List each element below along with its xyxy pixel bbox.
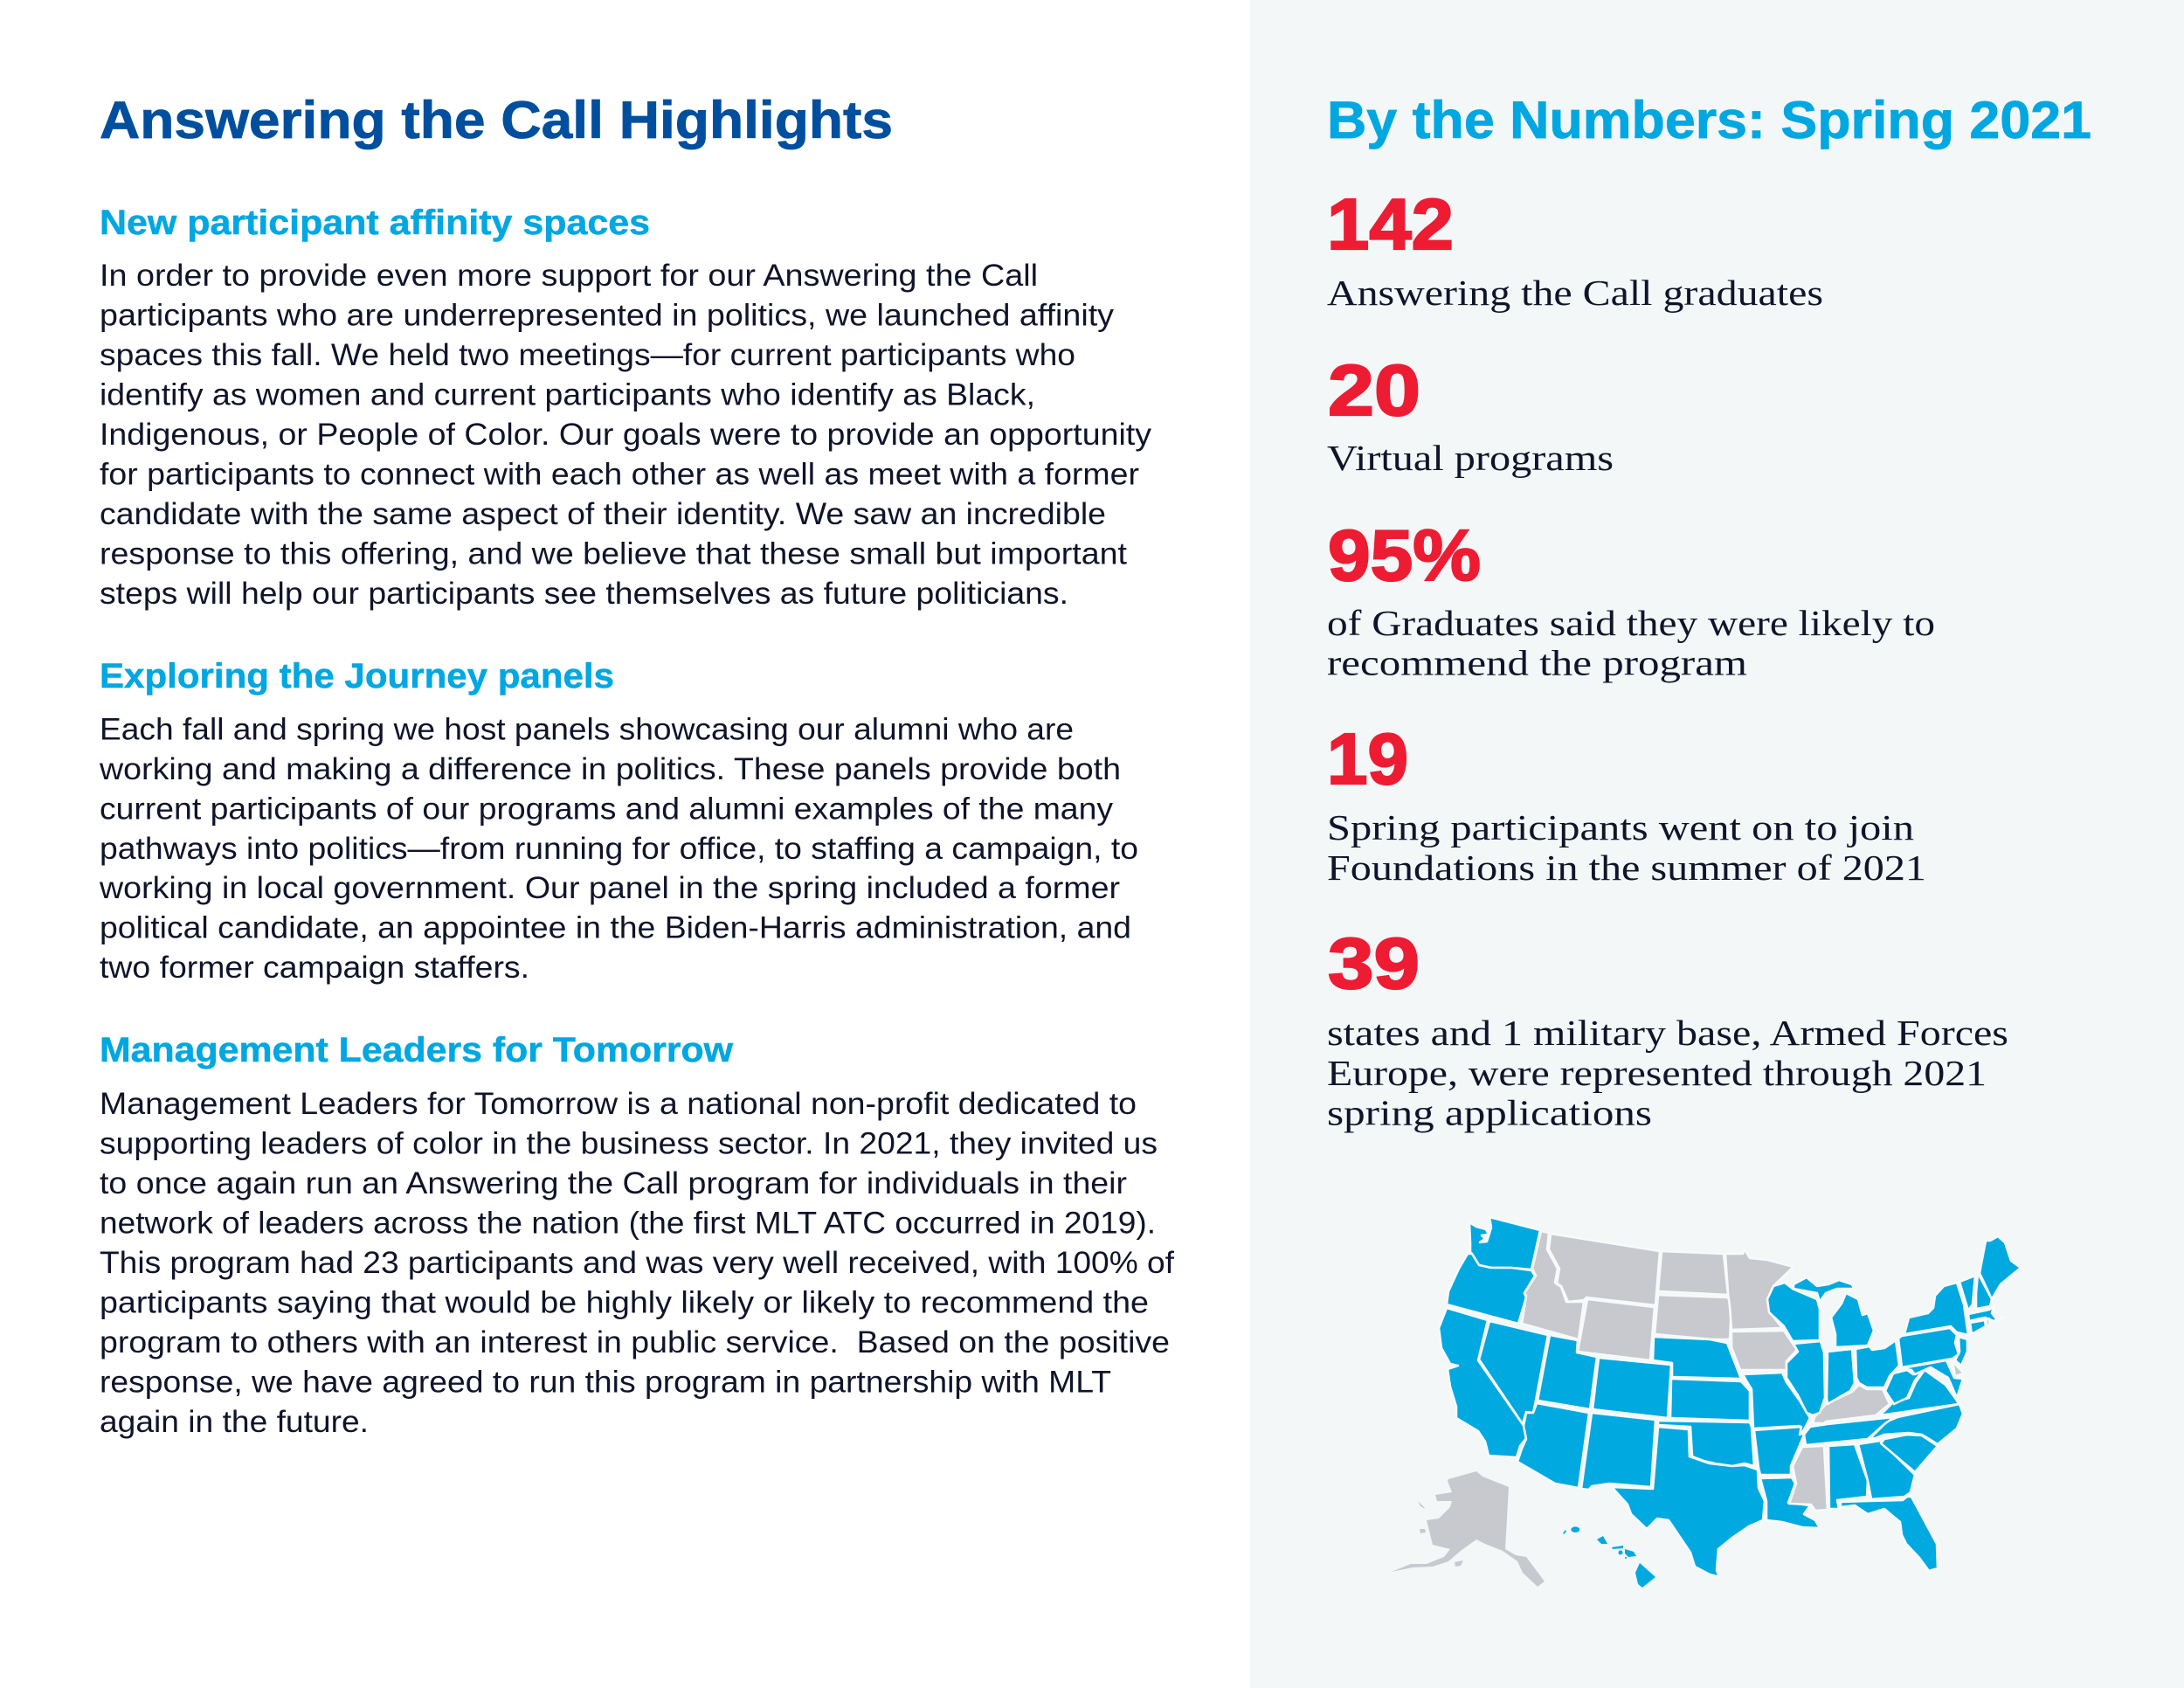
section: Exploring the Journey panels (99, 657, 1138, 985)
section: Management Leaders for Tomorrow (100, 1031, 1174, 1439)
text block: journey panels description: working and making a difference in politics. These panels provide both (99, 752, 1121, 786)
text block: affinity spaces description: Indigenous, or People of Color. Our goals were to provide an opportunity (100, 418, 1152, 452)
state: Hawaii (1563, 1526, 1655, 1588)
heading: Management Leaders for Tomorrow: Management Leaders for Tomorrow (100, 1031, 734, 1069)
text block: MLT description: again in the future. (100, 1405, 369, 1439)
stat: 95% likely to recommend: 95% (1328, 515, 1481, 596)
map: United States, represented states in blue (1392, 1217, 2021, 1588)
text block: journey panels description: current participants of our programs and alumni examples of the many (100, 792, 1114, 827)
text block: MLT description: program to others with an interest in public service. Based on the positive (100, 1325, 1170, 1359)
title: By the Numbers: Spring 2021: By the Numbers: Spring 2021 (1327, 91, 2091, 149)
text block: MLT description: Management Leaders for Tomorrow is a national non-profit dedicated to (100, 1087, 1137, 1121)
stat: 142 graduates: 142 (1327, 183, 1454, 265)
text block: journey panels description: two former campaign staffers. (100, 951, 529, 985)
text block: journey panels description: Each fall and spring we host panels showcasing our alumni who are (100, 713, 1074, 746)
text block: affinity spaces description: for participants to connect with each other as well as meet with a former (100, 458, 1139, 491)
text block: affinity spaces description: identify as women and current participants who identify as Black, (100, 377, 1035, 412)
title: Answering the Call Highlights: Answering the Call Highlights (100, 91, 893, 149)
stat: 39 states represented: Europe, were represented through 2021 (1327, 1053, 1987, 1093)
stat: 39 states represented: states and 1 military base, Armed Forces (1327, 1013, 2008, 1053)
text block: journey panels description (99, 713, 1138, 985)
heading: Exploring the Journey panels: Exploring the Journey panels (100, 657, 614, 695)
panel: right background (1250, 0, 2184, 1688)
stat: 39 states represented: spring applications (1327, 1092, 1652, 1132)
stat: 142 graduates: Answering the Call graduates (1327, 273, 1823, 313)
stat: 95% likely to recommend: of Graduates said they were likely to (1327, 603, 1935, 643)
stat: 95% likely to recommend: recommend the program (1327, 643, 1747, 683)
text block: journey panels description: working in local government. Our panel in the spring included a former (99, 871, 1120, 905)
text block: affinity spaces description: steps will help our participants see themselves as future politicians. (100, 577, 1068, 611)
stat: 19 joined Foundations: Foundations in the summer of 2021 (1327, 847, 1926, 888)
text block: affinity spaces description: participants who are underrepresented in politics, we launched affinity (100, 299, 1115, 332)
text block: MLT description: to once again run an Answering the Call program for individuals in their (100, 1166, 1127, 1200)
stat: 19 joined Foundations (1327, 718, 1926, 888)
stat: 39 states represented: 39 (1328, 923, 1420, 1004)
heading: New participant affinity spaces: New participant affinity spaces (100, 204, 650, 242)
stat: 19 joined Foundations: 19 (1327, 718, 1408, 799)
text block: journey panels description: political candidate, an appointee in the Biden-Harris administration, and (100, 910, 1131, 945)
stat: 20 virtual programs: Virtual programs (1327, 438, 1614, 478)
text block: MLT description: participants saying that would be highly likely or likely to recommend the (100, 1286, 1149, 1319)
text block: MLT description: response, we have agreed to run this program in partnership with MLT (100, 1365, 1111, 1400)
stat: 39 states represented (1327, 923, 2008, 1132)
stat: 20 virtual programs (1327, 349, 1614, 478)
text block: affinity spaces description (100, 259, 1152, 611)
text block: MLT description: network of leaders across the nation (the first MLT ATC occurred in 2019). (100, 1206, 1156, 1241)
state: Alaska (1392, 1471, 1545, 1587)
text block: affinity spaces description: candidate with the same aspect of their identity. We saw an incredible (100, 497, 1106, 531)
section: New participant affinity spaces (100, 204, 1152, 611)
text block: journey panels description: pathways into politics—from running for office, to staffing a campaign, to (100, 832, 1138, 866)
stat: 20 virtual programs: 20 (1328, 349, 1420, 431)
text block: affinity spaces description: In order to provide even more support for our Answering the Call (100, 259, 1038, 293)
stat: 142 graduates (1327, 183, 1823, 313)
stat: 95% likely to recommend (1327, 515, 1935, 683)
stat: 19 joined Foundations: Spring participants went on to join (1327, 807, 1914, 847)
text block: MLT description: supporting leaders of color in the business sector. In 2021, they invited us (100, 1127, 1158, 1160)
text block: affinity spaces description: response to this offering, and we believe that these small but important (100, 536, 1127, 571)
text block: MLT description: This program had 23 participants and was very well received, with 100% of (100, 1246, 1174, 1280)
text block: affinity spaces description: spaces this fall. We held two meetings—for current participants who (100, 338, 1075, 372)
text block: MLT description (100, 1087, 1174, 1439)
